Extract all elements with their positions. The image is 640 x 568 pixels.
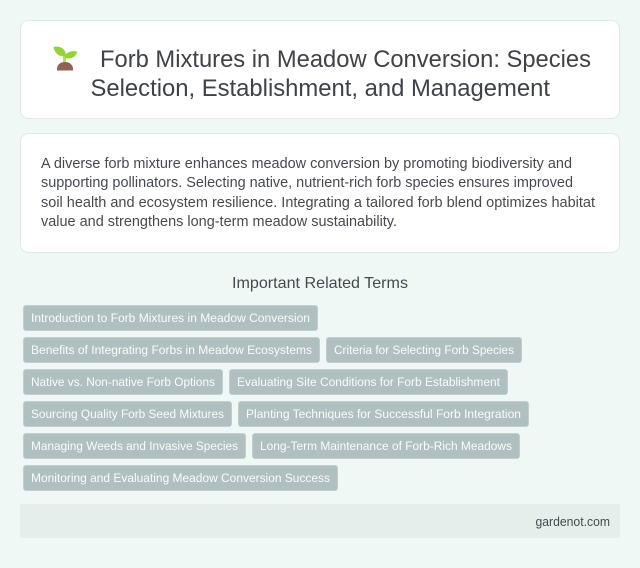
tag <box>252 434 520 458</box>
tag <box>238 402 528 426</box>
tag: Managing Weeds and Invasive Species <box>31 439 238 453</box>
tag: Benefits of Integrating Forbs in Meadow Ecosystems <box>31 343 312 357</box>
tag: Sourcing Quality Forb Seed Mixtures <box>31 407 224 421</box>
tag <box>24 402 232 426</box>
intro text: supporting pollinators. Selecting native, nutrient-rich forb species ensures improved <box>41 175 573 191</box>
intro text: soil health and ecosystem resilience. Integrating a tailored forb blend optimizes habitat <box>41 195 595 211</box>
tag <box>24 466 338 490</box>
title <box>90 46 591 102</box>
title: Selection, Establishment, and Management <box>90 75 550 102</box>
tag <box>24 306 318 330</box>
tag: Introduction to Forb Mixtures in Meadow Conversion <box>31 311 310 325</box>
tag: Evaluating Site Conditions for Forb Establishment <box>237 375 501 389</box>
tag: Criteria for Selecting Forb Species <box>334 343 514 357</box>
intro text <box>41 156 595 230</box>
heading: related terms: Important Related Terms <box>232 275 408 292</box>
intro text: value and strengthens long-term meadow sustainability. <box>41 214 397 230</box>
tag list <box>24 306 528 490</box>
tag <box>24 370 222 394</box>
icon: sprout <box>54 47 77 70</box>
panel: intro text card <box>20 134 620 252</box>
footer bar <box>20 504 620 538</box>
intro text: A diverse forb mixture enhances meadow conversion by promoting biodiversity and <box>41 156 572 172</box>
tag: Monitoring and Evaluating Meadow Conversion Success <box>31 471 330 485</box>
tag <box>326 338 522 362</box>
tag: Native vs. Non-native Forb Options <box>31 375 215 389</box>
footer credit: gardenot.com <box>536 515 610 529</box>
title: Forb Mixtures in Meadow Conversion: Species <box>100 46 591 73</box>
tag <box>230 370 508 394</box>
panel: title card <box>20 20 620 118</box>
tag <box>24 338 320 362</box>
tag: Planting Techniques for Successful Forb Integration <box>246 407 521 421</box>
tag: Long-Term Maintenance of Forb-Rich Meadows <box>260 439 512 453</box>
tag <box>24 434 246 458</box>
